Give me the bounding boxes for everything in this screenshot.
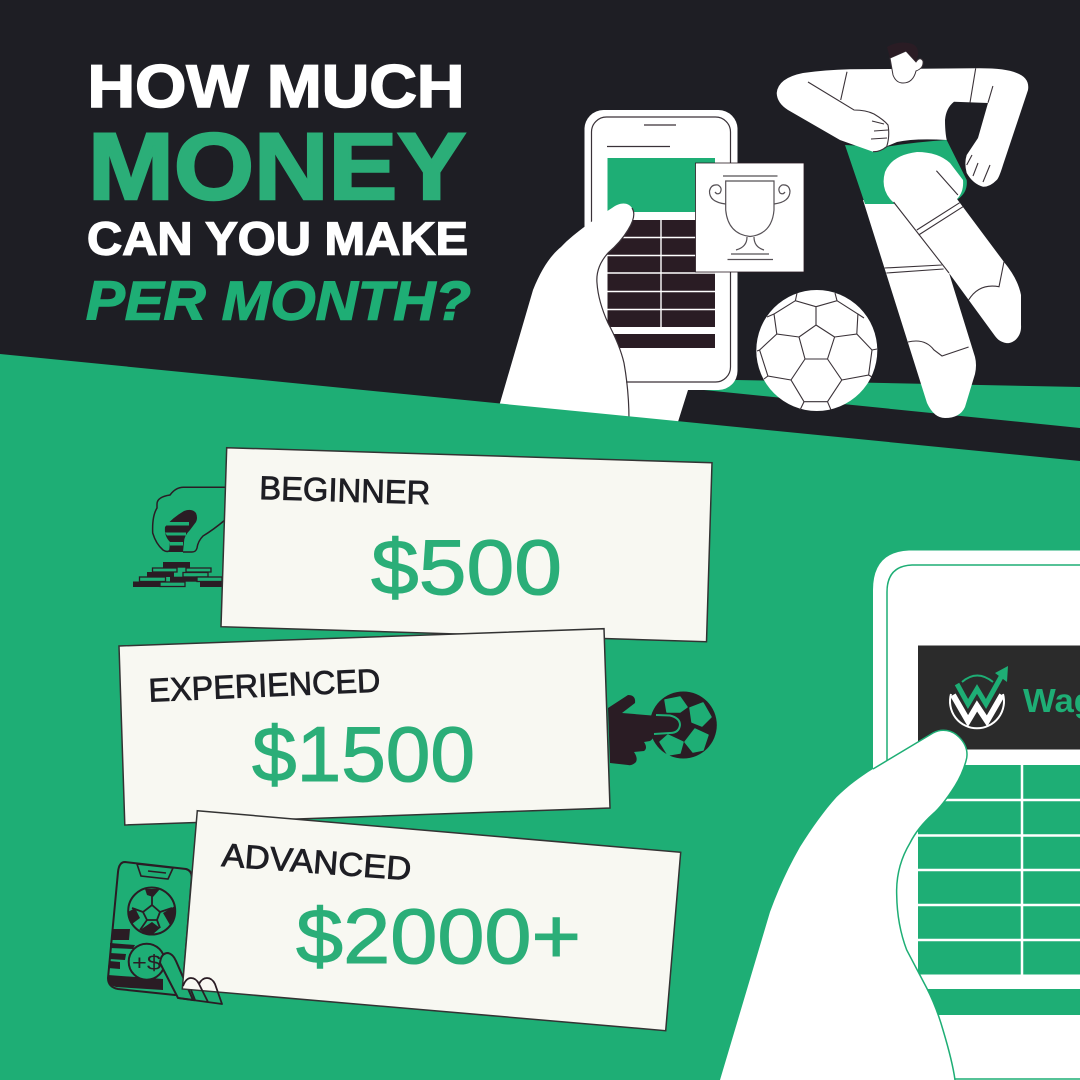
illustration: phone in hand with table [490,110,738,425]
card: advanced [182,811,681,1031]
title: PER MONTH? [86,270,471,332]
icon: trophy [709,176,790,260]
hand outline [597,208,634,420]
title [86,53,471,332]
icon: hand placing betting chips [133,487,225,587]
app header banner [918,646,1080,750]
illustration: football player [777,42,1028,418]
head [890,51,923,83]
phone bottom bar [608,334,715,348]
label: advanced: ADVANCED [220,836,413,887]
illustration: trophy card [696,163,804,272]
amount: $1500: $1500 [252,710,475,798]
app bottom bar [918,989,1080,1015]
large hand outline [873,730,967,1080]
standing leg [863,200,976,418]
icon: hand pointing at football [608,692,717,765]
hair [887,42,918,62]
large phone body [873,550,1080,1080]
phone icon football [128,888,175,935]
back leg [884,152,1021,343]
card: beginner [221,448,712,642]
icon: fingers over advanced card [178,978,222,1004]
phone green banner [608,158,715,212]
phone body [584,110,738,390]
label: experienced: EXPERIENCED [148,662,381,709]
large phone inner outline [887,565,1080,1079]
title: CAN YOU MAKE [87,212,468,264]
app table [918,765,1080,975]
icon: phone with football and coin [108,862,193,1000]
hand holding phone [490,204,688,425]
phone inner outline [592,117,730,382]
green shorts [845,140,967,204]
illustration: football [756,290,877,411]
phone table [607,220,716,327]
large hand [720,730,967,1080]
phone speaker lines [607,125,676,146]
player contour lines [808,68,1004,356]
ground stripe [704,380,1080,428]
label: beginner: BEGINNER [259,469,431,511]
coin symbol: +$ [132,952,161,975]
main green section [0,354,1080,1080]
amount: $500: $500 [371,523,562,611]
amount: $2000+: $2000+ [296,892,581,980]
illustration: large phone with app [720,550,1080,1080]
torso and arms [777,68,1028,187]
logo [950,666,1008,728]
card: experienced [119,629,610,825]
title: HOW MUCH [88,53,464,120]
title: MONEY [88,114,466,220]
